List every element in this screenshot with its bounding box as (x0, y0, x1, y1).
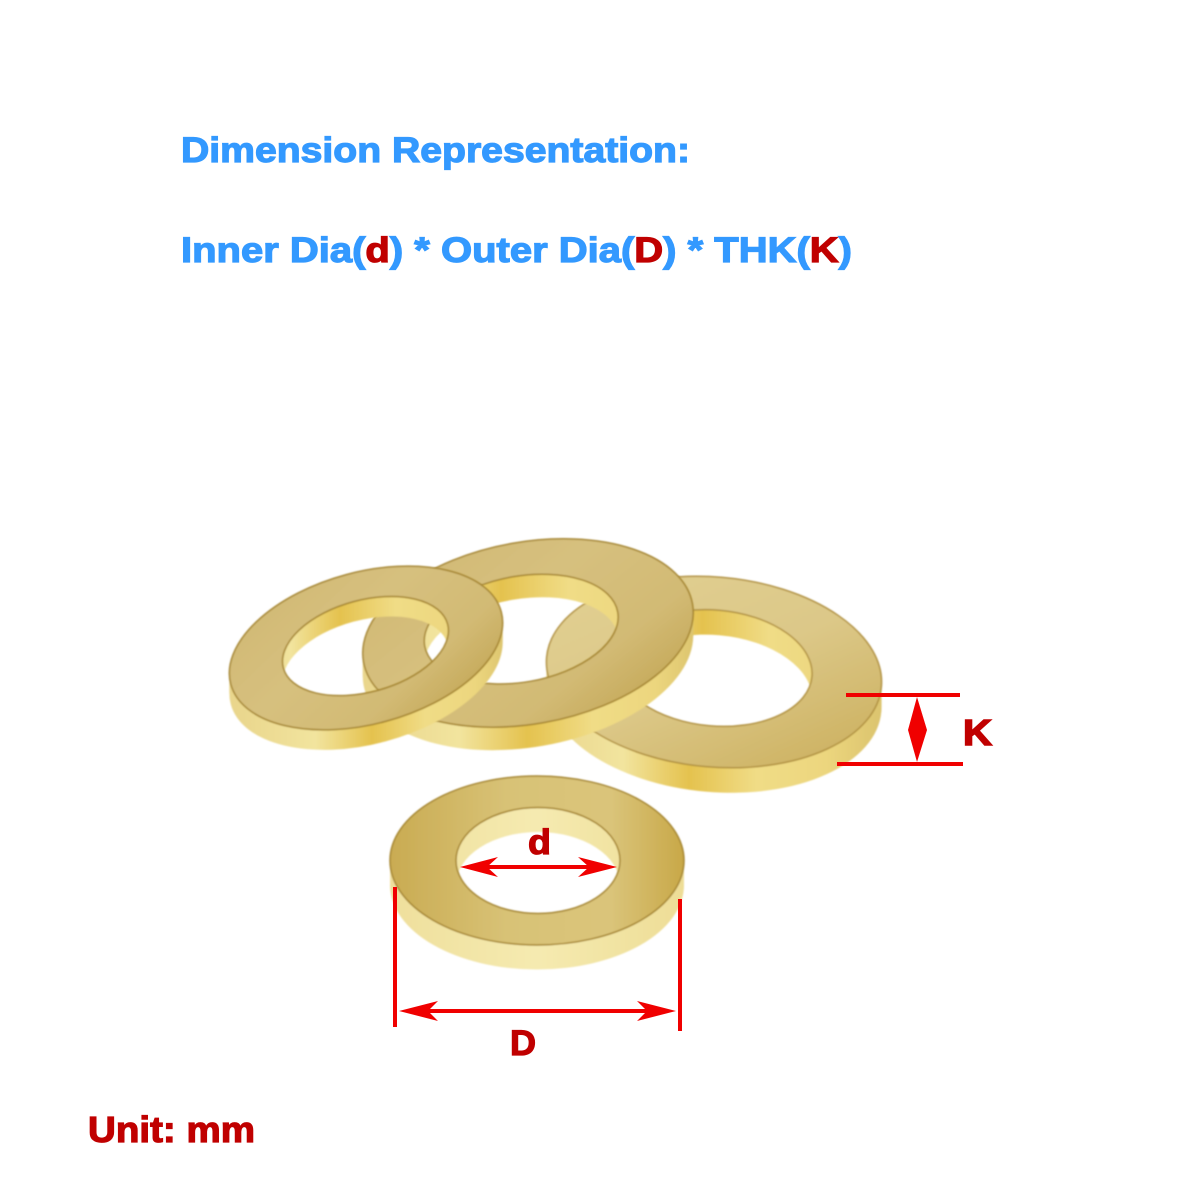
unit note: Unit: mm (88, 1109, 255, 1150)
label D: D (510, 1024, 536, 1063)
dimension d: inner diameter arrow (460, 857, 617, 877)
title: dimension representation: Dimension Representation: (181, 131, 690, 170)
dimension D: outer diameter arrow (393, 887, 682, 1031)
label K: K (963, 712, 992, 753)
washer: front (390, 776, 684, 970)
washer: middle (348, 514, 708, 775)
label d: d (528, 823, 551, 862)
washer: back right (538, 563, 890, 806)
formula: inner dia, outer dia, thickness: Inner Dia( d) * Outer Dia( D) * THK( K) (181, 231, 852, 270)
dimension K: thickness arrow (837, 693, 963, 766)
washer: left (211, 538, 521, 778)
